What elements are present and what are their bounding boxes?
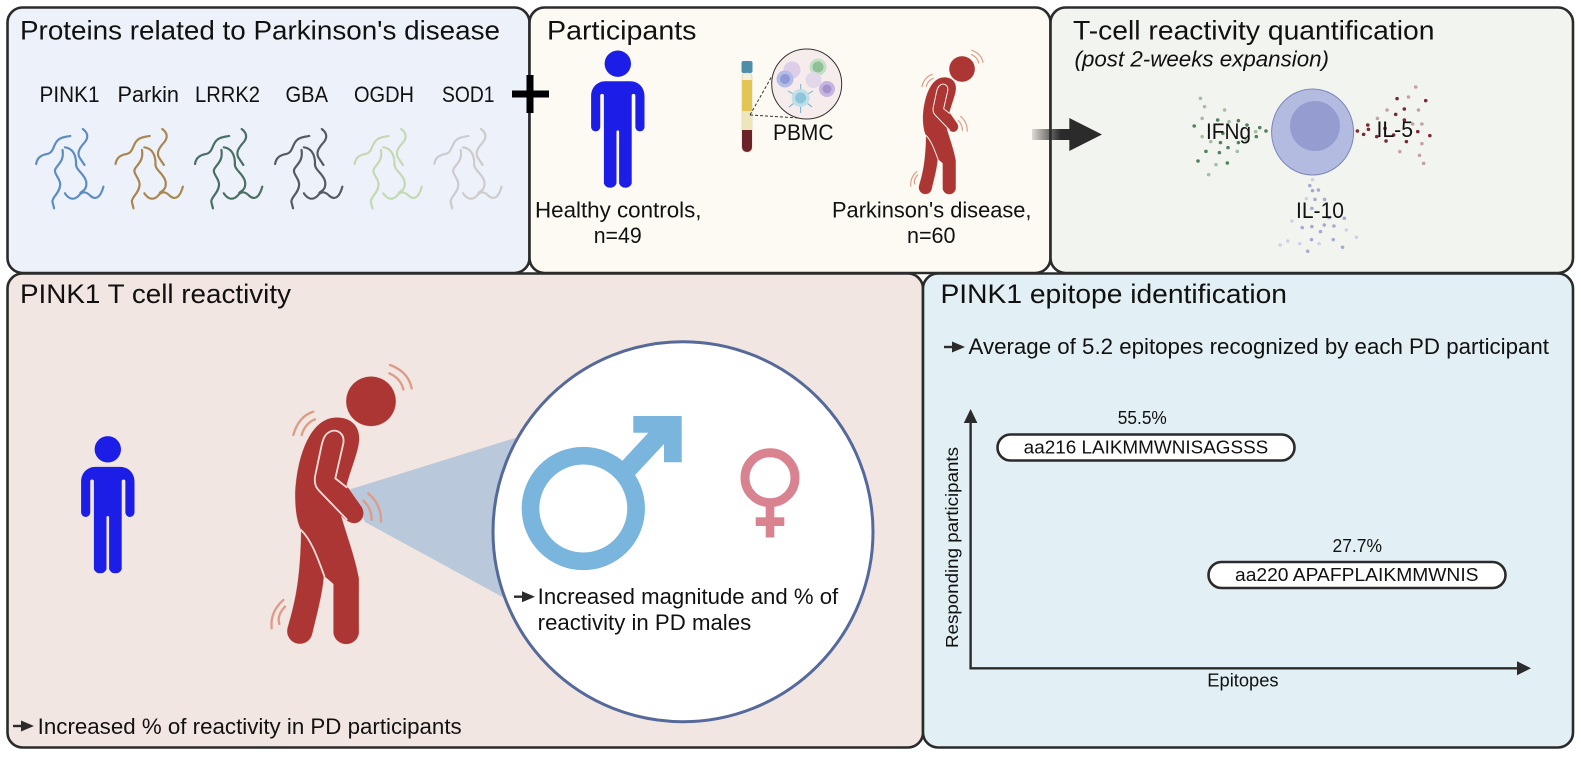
x axis label: Epitopes (1207, 670, 1279, 690)
icon: T cell (1272, 89, 1354, 175)
protein labels: OGDH (354, 82, 414, 107)
icon: blood tube (742, 61, 799, 152)
arrow (514, 591, 535, 602)
protein labels: LRRK2 (195, 82, 260, 107)
callout text (538, 584, 839, 635)
protein labels: GBA (286, 82, 328, 107)
callout text: reactivity in PD males (538, 610, 751, 635)
cytokine labels: IL-5 (1376, 117, 1413, 142)
epitope aa216 (998, 408, 1294, 460)
heading: participants: Participants (547, 16, 696, 46)
label: Parkinson's disease: Parkinson's disease, (832, 198, 1032, 222)
finding text: Increased % of reactivity in PD participants (38, 714, 462, 739)
panel: participants (530, 8, 1050, 273)
panel: proteins related to Parkinson's disease (8, 8, 530, 273)
panel: PINK1 epitope identification (923, 274, 1573, 748)
icon: male symbol (530, 416, 682, 561)
icon: healthy control person (591, 51, 644, 188)
cytokine dots (1194, 87, 1430, 251)
arrow: participants to quantification (1032, 118, 1102, 151)
label: healthy controls: n=49 (594, 223, 642, 248)
heading: T-cell reactivity: T-cell reactivity quantification (1073, 16, 1434, 46)
panel: PINK1 T cell reactivity (8, 274, 923, 748)
axes (964, 409, 1531, 675)
icon: Parkinson's participant (911, 50, 983, 194)
protein squiggles (36, 129, 502, 208)
cytokine labels (1206, 117, 1413, 223)
epitope aa216: 55.5% (1118, 408, 1167, 428)
label: Parkinson's disease (832, 198, 1032, 248)
label: Parkinson's disease: n=60 (907, 223, 956, 248)
heading: proteins: Proteins related to Parkinson's disease (20, 16, 500, 46)
protein labels (40, 82, 494, 107)
heading: PINK1 T cell reactivity: PINK1 T cell reactivity (20, 279, 292, 309)
callout text: Increased magnitude and % of (538, 584, 839, 609)
arrow (944, 342, 965, 352)
icon: Parkinson's patient (271, 365, 412, 644)
arrow (13, 720, 34, 732)
subheading: expansion: (post 2-weeks expansion) (1074, 46, 1329, 72)
icon: female symbol (745, 453, 795, 538)
epitope chart (942, 408, 1531, 690)
icon: healthy person (81, 436, 134, 573)
zoom cone (348, 438, 600, 600)
plus sign (512, 75, 549, 113)
cytokine labels: IFNg (1206, 119, 1251, 144)
protein labels: SOD1 (442, 82, 494, 107)
panel: T-cell reactivity quantification (1050, 8, 1573, 273)
epitope aa220 (1208, 536, 1506, 588)
label: PBMC: PBMC (773, 120, 834, 145)
epitope aa216: aa216 LAIKMMWNISAGSSS (1024, 436, 1268, 457)
epitope aa220: 27.7% (1332, 536, 1382, 556)
protein labels: PINK1 (40, 82, 100, 107)
icon: PBMC cells (772, 49, 842, 119)
finding text: Average of 5.2 epitopes recognized by each PD participant (968, 334, 1549, 359)
label: healthy controls: Healthy controls, (535, 198, 702, 222)
cytokine labels: IL-10 (1296, 198, 1344, 223)
callout circle (493, 342, 873, 722)
y axis label: Responding participants (942, 447, 962, 648)
epitope aa220: aa220 APAFPLAIKMMWNIS (1235, 564, 1478, 585)
heading: epitope identification: PINK1 epitope identification (940, 279, 1287, 309)
label: healthy controls (535, 198, 702, 248)
protein labels: Parkin (118, 82, 179, 107)
